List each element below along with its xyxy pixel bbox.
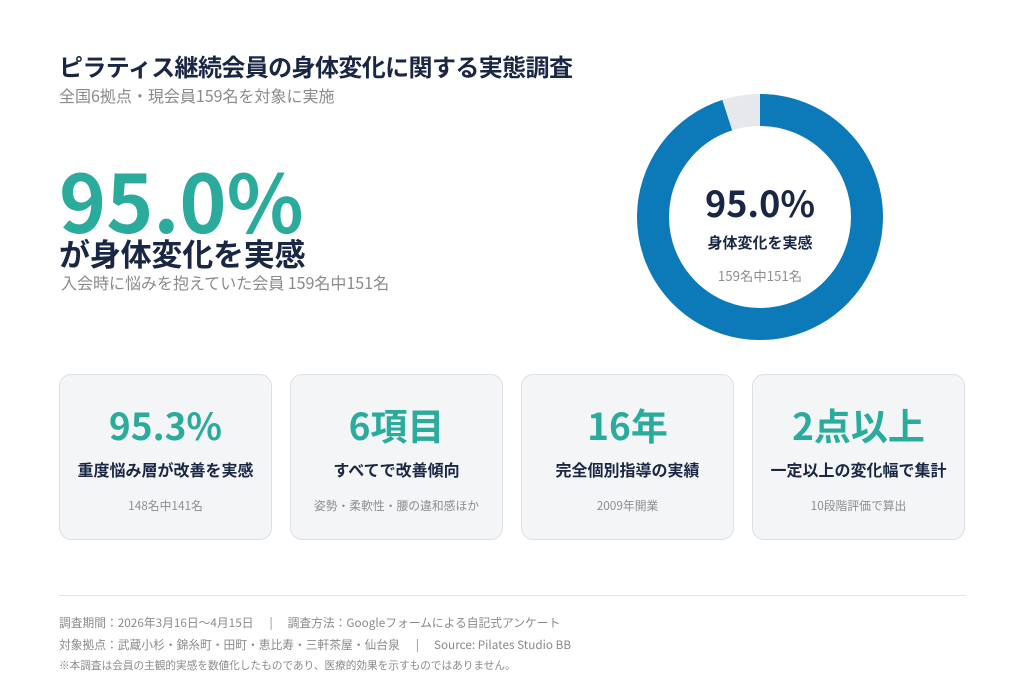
panel: severe concerns: 重度悩み層が改善を実感: [77, 457, 254, 481]
donut chart: [637, 94, 883, 340]
panel: severe concerns: 95.3%: [109, 397, 222, 451]
panel: severe concerns: [59, 374, 272, 540]
panel: sixteen years: 16年: [587, 397, 668, 451]
hero percentage: 95.0%: [59, 141, 304, 257]
title: ピラティス継続会員の身体変化に関する実態調査: [59, 48, 572, 83]
panel: six items: 6項目: [349, 397, 444, 451]
panel: two points or more: 2点以上: [792, 397, 925, 451]
panel: six items: すべてで改善傾向: [333, 457, 460, 481]
donut centre note: 159名中151名: [718, 266, 802, 285]
hero note: 入会時に悩みを抱えていた会員 159名中151名: [61, 270, 389, 294]
donut centre label: 身体変化を実感: [707, 232, 812, 253]
panel: six items: 姿勢・柔軟性・腰の違和感ほか: [314, 497, 479, 514]
panel: sixteen years: 完全個別指導の実績: [555, 457, 700, 481]
panel: severe concerns: 148名中141名: [128, 497, 203, 514]
footer: disclaimer: ※本調査は会員の主観的実感を数値化したものであり、医療的効果を示すものではありません。: [59, 658, 516, 673]
panel: two points or more: 一定以上の変化幅で集計: [770, 457, 946, 481]
panel: sixteen years: [521, 374, 734, 540]
panel: six items: [290, 374, 503, 540]
footer: locations and source: 対象拠点：武蔵小杉・錦糸町・田町・恵比寿・三軒茶屋・仙台泉 | Source: Pilates Studio BB: [59, 636, 571, 653]
hero label: が身体変化を実感: [59, 230, 305, 275]
subtitle: 全国6拠点・現会員159名を対象に実施: [59, 83, 335, 107]
panel: two points or more: [752, 374, 965, 540]
panel: two points or more: 10段階評価で算出: [811, 497, 906, 514]
donut centre value: 95.0%: [705, 176, 815, 228]
panel: sixteen years: 2009年開業: [597, 497, 658, 514]
footer: period and method: 調査期間：2026年3月16日〜4月15日 | 調査方法：Googleフォームによる自記式アンケート: [59, 614, 560, 631]
